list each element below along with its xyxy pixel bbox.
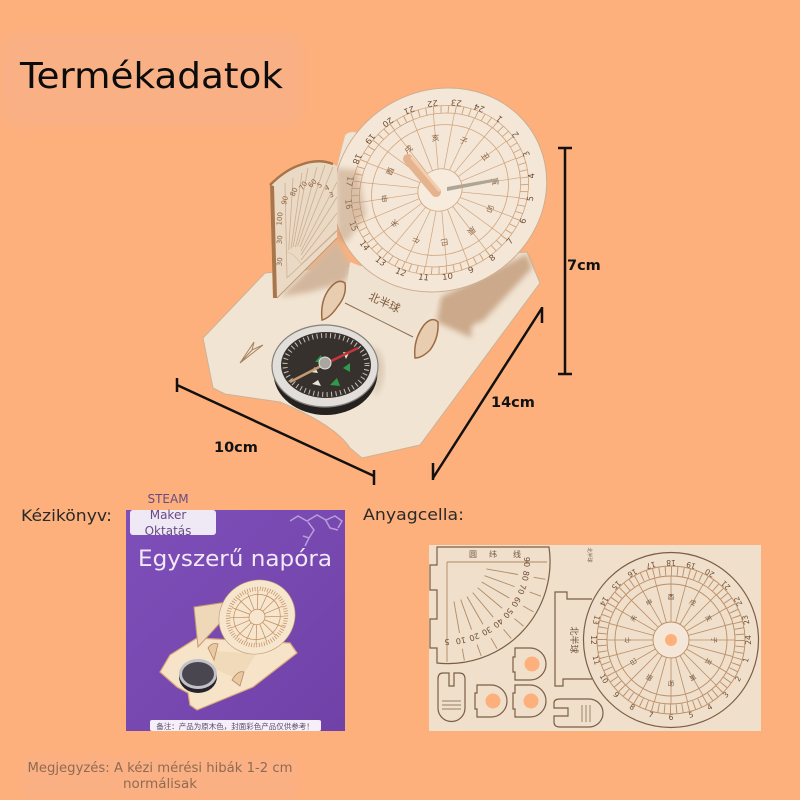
title: Termékadatok — [19, 56, 283, 97]
quadrant plate: 90 — [280, 195, 290, 206]
dial cutout: 14 — [597, 595, 610, 608]
main dial: 18 — [350, 152, 364, 166]
gnomon pin — [408, 158, 439, 192]
main dial: 5 — [525, 196, 536, 202]
dial cutout: 寅 — [687, 672, 698, 684]
main dial: 14 — [357, 238, 372, 253]
quadrant cutout: 90 — [522, 557, 531, 567]
dial cutout: 21 — [719, 578, 732, 592]
main dial: 卯 — [483, 203, 496, 214]
dial cutout: 申 — [644, 596, 654, 608]
main dial: 巳 — [440, 236, 449, 248]
dial cutout: 3 — [721, 690, 731, 700]
label: manual: Kézikönyv: — [21, 506, 112, 525]
dial cutout: 16 — [626, 567, 639, 579]
cover tag — [130, 510, 216, 535]
main dial: 21 — [402, 104, 416, 117]
arrow mark — [240, 342, 263, 363]
main dial: 23 — [450, 98, 463, 108]
main dial: 15 — [347, 219, 360, 233]
dial cutout: 酉 — [668, 591, 675, 601]
main dial: 7 — [504, 236, 515, 246]
footnote: Megjegyzés: A kézi mérési hibák 1-2 cm — [28, 761, 292, 776]
dial cutout: 6 — [669, 713, 674, 722]
quadrant cutout: 40 — [491, 616, 505, 630]
dimension: height 7cm: 7cm — [567, 258, 601, 274]
small mark: 北半球 — [586, 547, 593, 563]
main dial: 16 — [343, 198, 354, 210]
cover tag text — [145, 492, 191, 538]
main dial: 19 — [363, 132, 378, 146]
main dial — [298, 59, 582, 321]
quadrant plate: 80 — [289, 186, 300, 198]
footnote: normálisak — [123, 777, 197, 792]
dial cutout — [584, 552, 758, 728]
dial cutout: 2 — [733, 674, 743, 683]
main dial: 1 — [494, 113, 505, 124]
main dial: 3 — [520, 150, 532, 158]
quadrant cutout: 60 — [509, 595, 522, 608]
foot piece horizontal — [554, 699, 603, 727]
dial cutout: 19 — [685, 560, 697, 571]
main dial: 申 — [379, 194, 391, 203]
quadrant plate: 5 — [316, 181, 324, 190]
cover heading: Egyszerű napóra — [138, 547, 332, 572]
main dial: 24 — [472, 102, 486, 115]
stand label: 北半球 — [366, 288, 403, 316]
main dial: 亥 — [431, 132, 440, 144]
dial cutout: 8 — [628, 702, 637, 712]
dial cutout: 辰 — [643, 672, 654, 684]
dimension: width 10cm: 10cm — [214, 440, 258, 456]
round piece 2 — [475, 685, 507, 717]
main dial: 11 — [417, 272, 430, 282]
dial cutout: 5 — [688, 710, 695, 720]
main dial: 4 — [526, 172, 537, 179]
quadrant cutout: 20 — [468, 631, 481, 643]
main dial: 戌 — [402, 143, 415, 156]
main dial: 9 — [467, 264, 475, 275]
dial cutout: 戌 — [688, 596, 699, 608]
dial cutout: 12 — [589, 635, 598, 645]
main dial: 丑 — [478, 150, 492, 163]
dial cutout: 亥 — [703, 613, 715, 624]
dial cutout: 9 — [611, 690, 621, 700]
dial cutout: 巳 — [627, 656, 639, 667]
quadrant cutout: 70 — [516, 583, 528, 596]
main dial: 8 — [487, 252, 497, 263]
panel: manual cover — [126, 492, 345, 732]
footnote — [22, 756, 298, 798]
quadrant cutout: 10 — [455, 635, 467, 646]
gnomon shadow — [447, 178, 498, 191]
main dial: 12 — [394, 265, 408, 278]
dimension: height 7cm — [558, 148, 601, 374]
molecule decoration — [290, 515, 342, 546]
quadrant cutout: 30 — [480, 624, 493, 637]
main dial: 寅 — [489, 177, 501, 186]
dial cutout: 10 — [598, 672, 610, 685]
dial cutout: 11 — [591, 654, 602, 666]
main dial: 10 — [442, 271, 453, 282]
mini sundial — [160, 569, 307, 710]
dial cutout: 24 — [744, 635, 753, 645]
stand tab: 北半球 — [568, 626, 581, 654]
main dial: 2 — [510, 129, 521, 140]
main dial: 20 — [380, 115, 395, 129]
compass — [272, 325, 384, 415]
dimension: width 10cm — [177, 378, 374, 485]
quadrant cutout: 50 — [501, 606, 515, 620]
round piece 1 — [513, 648, 546, 680]
quadrant plate: 70 — [298, 180, 309, 192]
main dial: 22 — [427, 98, 438, 109]
main dial: 辰 — [465, 224, 478, 237]
main dial: 子 — [457, 135, 470, 147]
round piece 3 — [513, 685, 546, 717]
title — [0, 32, 303, 128]
panel: material sheet — [429, 545, 761, 731]
dial cutout: 13 — [591, 614, 602, 626]
dimension: depth 14cm — [433, 307, 542, 480]
quadrant cutout: 5 — [444, 637, 450, 646]
cover tag text: Maker — [150, 508, 186, 522]
quadrant plate: 30 — [276, 235, 284, 245]
stand tab — [555, 592, 592, 686]
quadrant cutout: 线 — [513, 549, 521, 560]
dial cutout: 7 — [647, 710, 655, 720]
dial cutout: 4 — [705, 702, 714, 712]
right foot — [415, 320, 438, 358]
quadrant cutout: 圆 — [469, 549, 477, 560]
left foot — [322, 281, 345, 320]
dial cutout: 1 — [741, 656, 751, 664]
quadrant cutout: 80 — [520, 570, 531, 582]
quadrant plate: 30 — [276, 257, 284, 267]
dial cutout: 22 — [732, 595, 744, 608]
dial cutout: 午 — [622, 636, 632, 643]
quadrant plate: 3 — [328, 191, 335, 200]
dial shadow on base — [437, 254, 532, 338]
main dial: 6 — [517, 217, 529, 225]
main dial: 未 — [388, 217, 402, 230]
cover tag text: Oktatás — [145, 524, 191, 538]
cover tag text: STEAM — [147, 492, 189, 506]
dial cutout: 子 — [710, 637, 720, 644]
quadrant shadow on dial — [336, 168, 366, 243]
dial cutout: 17 — [645, 560, 657, 571]
dial cutout: 卯 — [668, 679, 674, 689]
dimension: depth 14cm: 14cm — [491, 395, 535, 411]
base plate — [203, 252, 540, 458]
dial cutout: 丑 — [703, 657, 715, 668]
dial cutout: 未 — [627, 612, 639, 623]
main dial: 17 — [344, 176, 356, 187]
quadrant shadow on base — [280, 240, 352, 297]
foot piece vertical — [438, 673, 465, 722]
quadrant plate: 60 — [307, 178, 319, 190]
cover note: 备注：产品为原木色，封面彩色产品仅供参考！ — [156, 721, 314, 732]
main dial: 午 — [410, 233, 423, 245]
dial cutout: 20 — [703, 566, 716, 579]
dial cutout: 18 — [666, 558, 676, 567]
quadrant cutout — [430, 547, 550, 664]
dial cutout: 15 — [609, 579, 623, 592]
quadrant cutout: 纬 — [489, 549, 497, 560]
photo: assembled sundial — [203, 59, 582, 458]
main dial: 13 — [373, 254, 388, 268]
label: material sheet: Anyagcella: — [363, 505, 464, 524]
stand and tab behind dial — [345, 262, 440, 337]
quadrant plate: 100 — [275, 212, 285, 226]
dial cutout: 23 — [740, 614, 751, 626]
quadrant plate — [270, 161, 337, 298]
quadrant plate: 4 — [323, 183, 331, 193]
main dial: 酉 — [384, 166, 397, 177]
